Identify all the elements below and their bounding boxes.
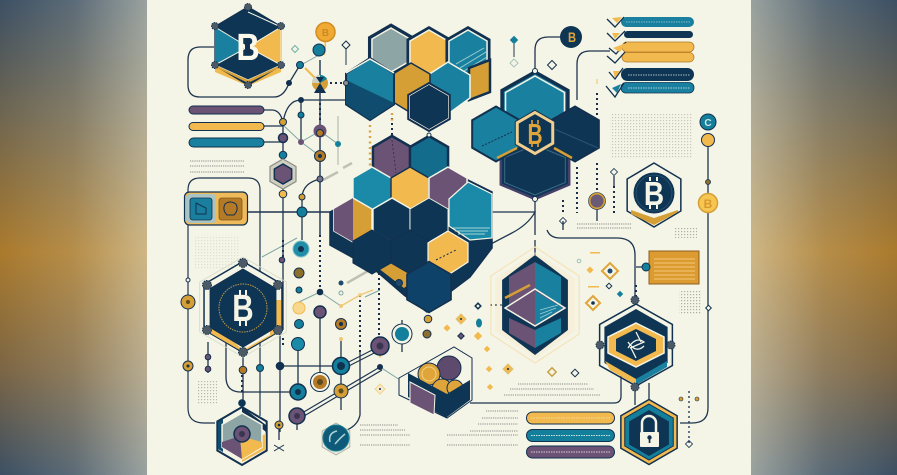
hexagon cluster: top — [346, 26, 490, 131]
teal bottom coin — [322, 423, 350, 455]
right column nodes: C — [704, 118, 712, 129]
small diamonds top — [292, 36, 556, 70]
wallet with coins — [399, 347, 472, 418]
paper background — [147, 0, 751, 475]
top-left blockchain hexagon — [212, 4, 284, 88]
large teal hexagon — [346, 58, 394, 120]
gold network line — [341, 290, 373, 306]
icon box — [184, 192, 248, 225]
right dark hexagon — [551, 106, 599, 162]
bitcoin badge hexagon: B — [644, 176, 664, 213]
network nodes upper left — [278, 22, 348, 217]
gold dash — [596, 79, 598, 84]
faint halftone and text placeholder areas — [190, 113, 702, 445]
hexagon cluster: right with bitcoin: B — [527, 119, 543, 151]
thin grey network lines — [262, 55, 400, 380]
lower-right exchange hexagon — [596, 296, 675, 391]
gold dotted lines — [370, 113, 392, 173]
teal hexagon — [410, 136, 448, 180]
gold wedge — [378, 259, 428, 288]
left teal hexagon — [472, 106, 520, 162]
centre-right cube hexagon — [491, 247, 579, 363]
small coin node — [560, 168, 618, 224]
scattered diamonds — [375, 252, 622, 394]
chevrons — [606, 17, 626, 97]
dark base silhouette — [330, 180, 492, 312]
purple hexagon — [373, 136, 411, 180]
gold block — [393, 63, 430, 113]
network nodes upper left: B — [322, 28, 329, 39]
centre bitcoin hexagon — [516, 110, 554, 156]
blurred left side panel — [0, 0, 147, 475]
bottom dark hexagon — [501, 141, 569, 199]
teal centre block — [428, 62, 470, 114]
split purple and gold hexagon — [334, 198, 372, 242]
left status bars — [189, 106, 264, 147]
bitcoin coin node — [560, 26, 582, 48]
blurred right side panel — [751, 0, 897, 475]
bitcoin badge hexagon — [627, 163, 681, 227]
bottom status bars — [526, 412, 614, 458]
top-right checklist bars — [606, 17, 694, 97]
hexagon cluster: right with bitcoin — [427, 68, 599, 202]
bottom dark hexagon — [407, 262, 451, 312]
right teal block — [449, 182, 492, 240]
gold tab — [469, 60, 490, 100]
grey stripes — [323, 163, 368, 283]
lower network nodes — [181, 241, 432, 451]
large bitcoin hexagon: B — [232, 288, 254, 330]
hexagon cluster: middle — [330, 136, 492, 312]
dark hexagon — [408, 83, 450, 131]
gold wedges — [497, 148, 572, 158]
yellow hexagon — [391, 167, 429, 211]
top-left blockchain hexagon: B — [236, 27, 260, 69]
lock side dots — [679, 391, 699, 448]
bitcoin coin node: B — [568, 30, 576, 45]
large bitcoin hexagon — [200, 257, 286, 357]
lower row — [353, 230, 391, 274]
dotted connector lines — [242, 83, 636, 395]
small purple hexagon node — [270, 159, 296, 189]
top teal hexagon — [502, 72, 568, 146]
right column nodes — [698, 114, 718, 311]
connector lines — [188, 37, 708, 440]
right column nodes: B — [704, 197, 713, 211]
bottom-left hexagon — [217, 399, 267, 465]
gold note banner — [642, 251, 699, 284]
padlock hexagon — [621, 400, 677, 464]
